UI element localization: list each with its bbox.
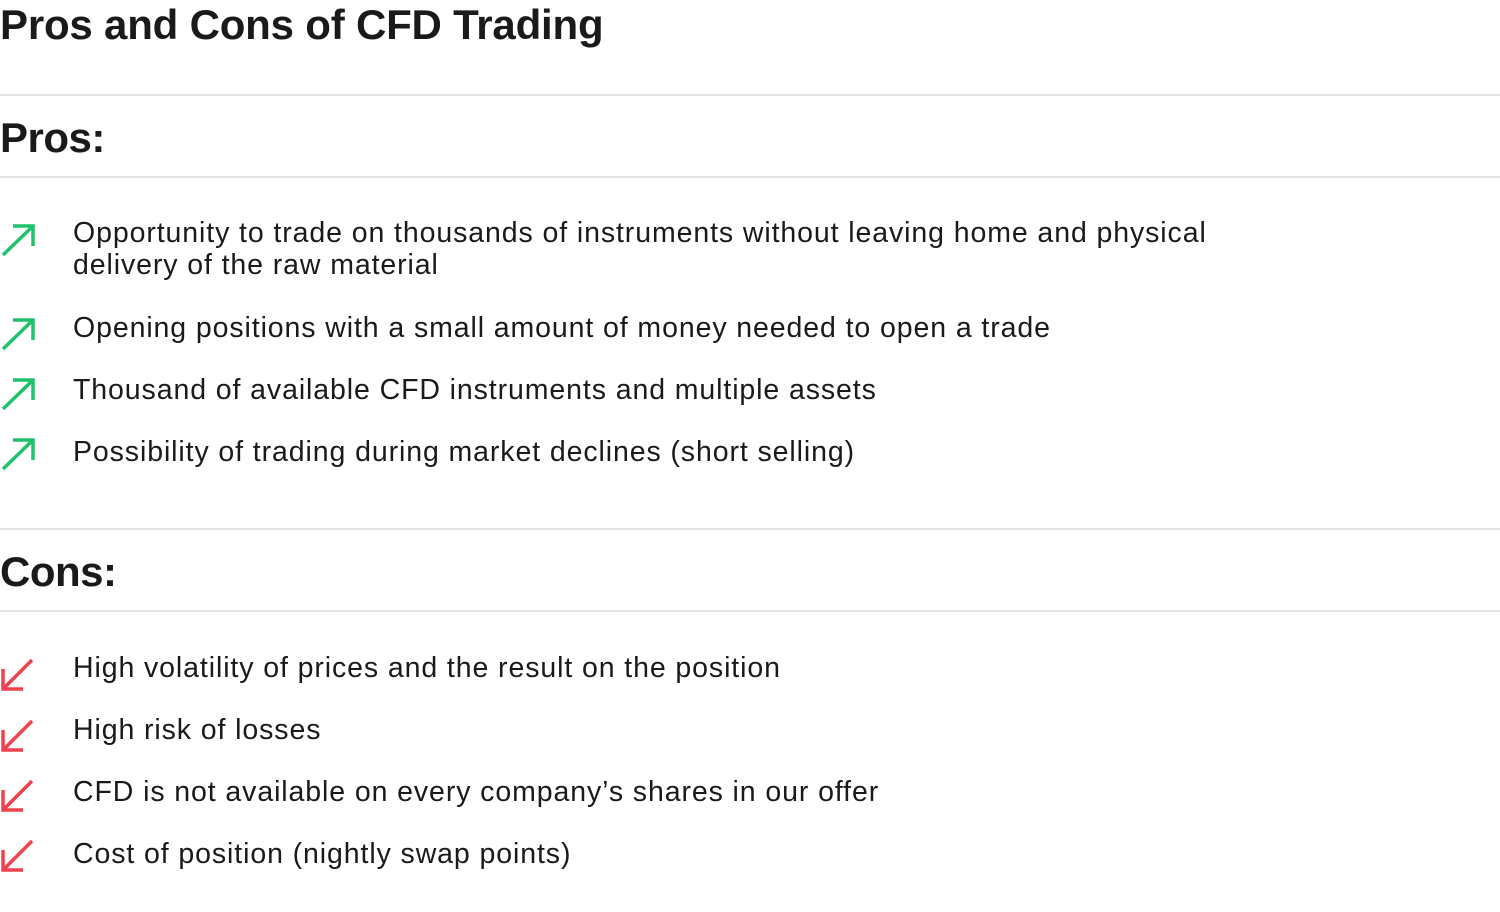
- con item 2: High risk of losses: [73, 714, 321, 746]
- con item 3: CFD is not available on every company’s shares in our offer: [73, 776, 879, 808]
- icon: down arrow: [1, 658, 34, 691]
- icon: up arrow: [2, 318, 35, 350]
- heading: pros: Pros:: [0, 114, 105, 161]
- con item 4: Cost of position (nightly swap points): [73, 838, 571, 870]
- icon: up arrow: [2, 438, 35, 470]
- heading: cons: Cons:: [0, 548, 116, 595]
- panel: pros list: [2, 217, 1207, 470]
- pro item 3: Thousand of available CFD instruments and multiple assets: [73, 374, 877, 406]
- con item 1: High volatility of prices and the result on the position: [73, 652, 781, 684]
- pro item 1: delivery of the raw material: [73, 249, 439, 281]
- pro item 1: Opportunity to trade on thousands of instruments without leaving home and physical: [73, 217, 1207, 249]
- icon: down arrow: [1, 720, 34, 752]
- icon: down arrow: [1, 780, 34, 812]
- panel: cons list: [1, 652, 879, 872]
- icon: up arrow: [2, 224, 35, 256]
- title: Pros and Cons of CFD Trading: [0, 1, 603, 48]
- icon: up arrow: [2, 378, 35, 410]
- icon: down arrow: [1, 840, 34, 872]
- pro item 4: Possibility of trading during market declines (short selling): [73, 436, 855, 468]
- pro item 2: Opening positions with a small amount of money needed to open a trade: [73, 312, 1051, 344]
- pro item 1: [73, 217, 1207, 281]
